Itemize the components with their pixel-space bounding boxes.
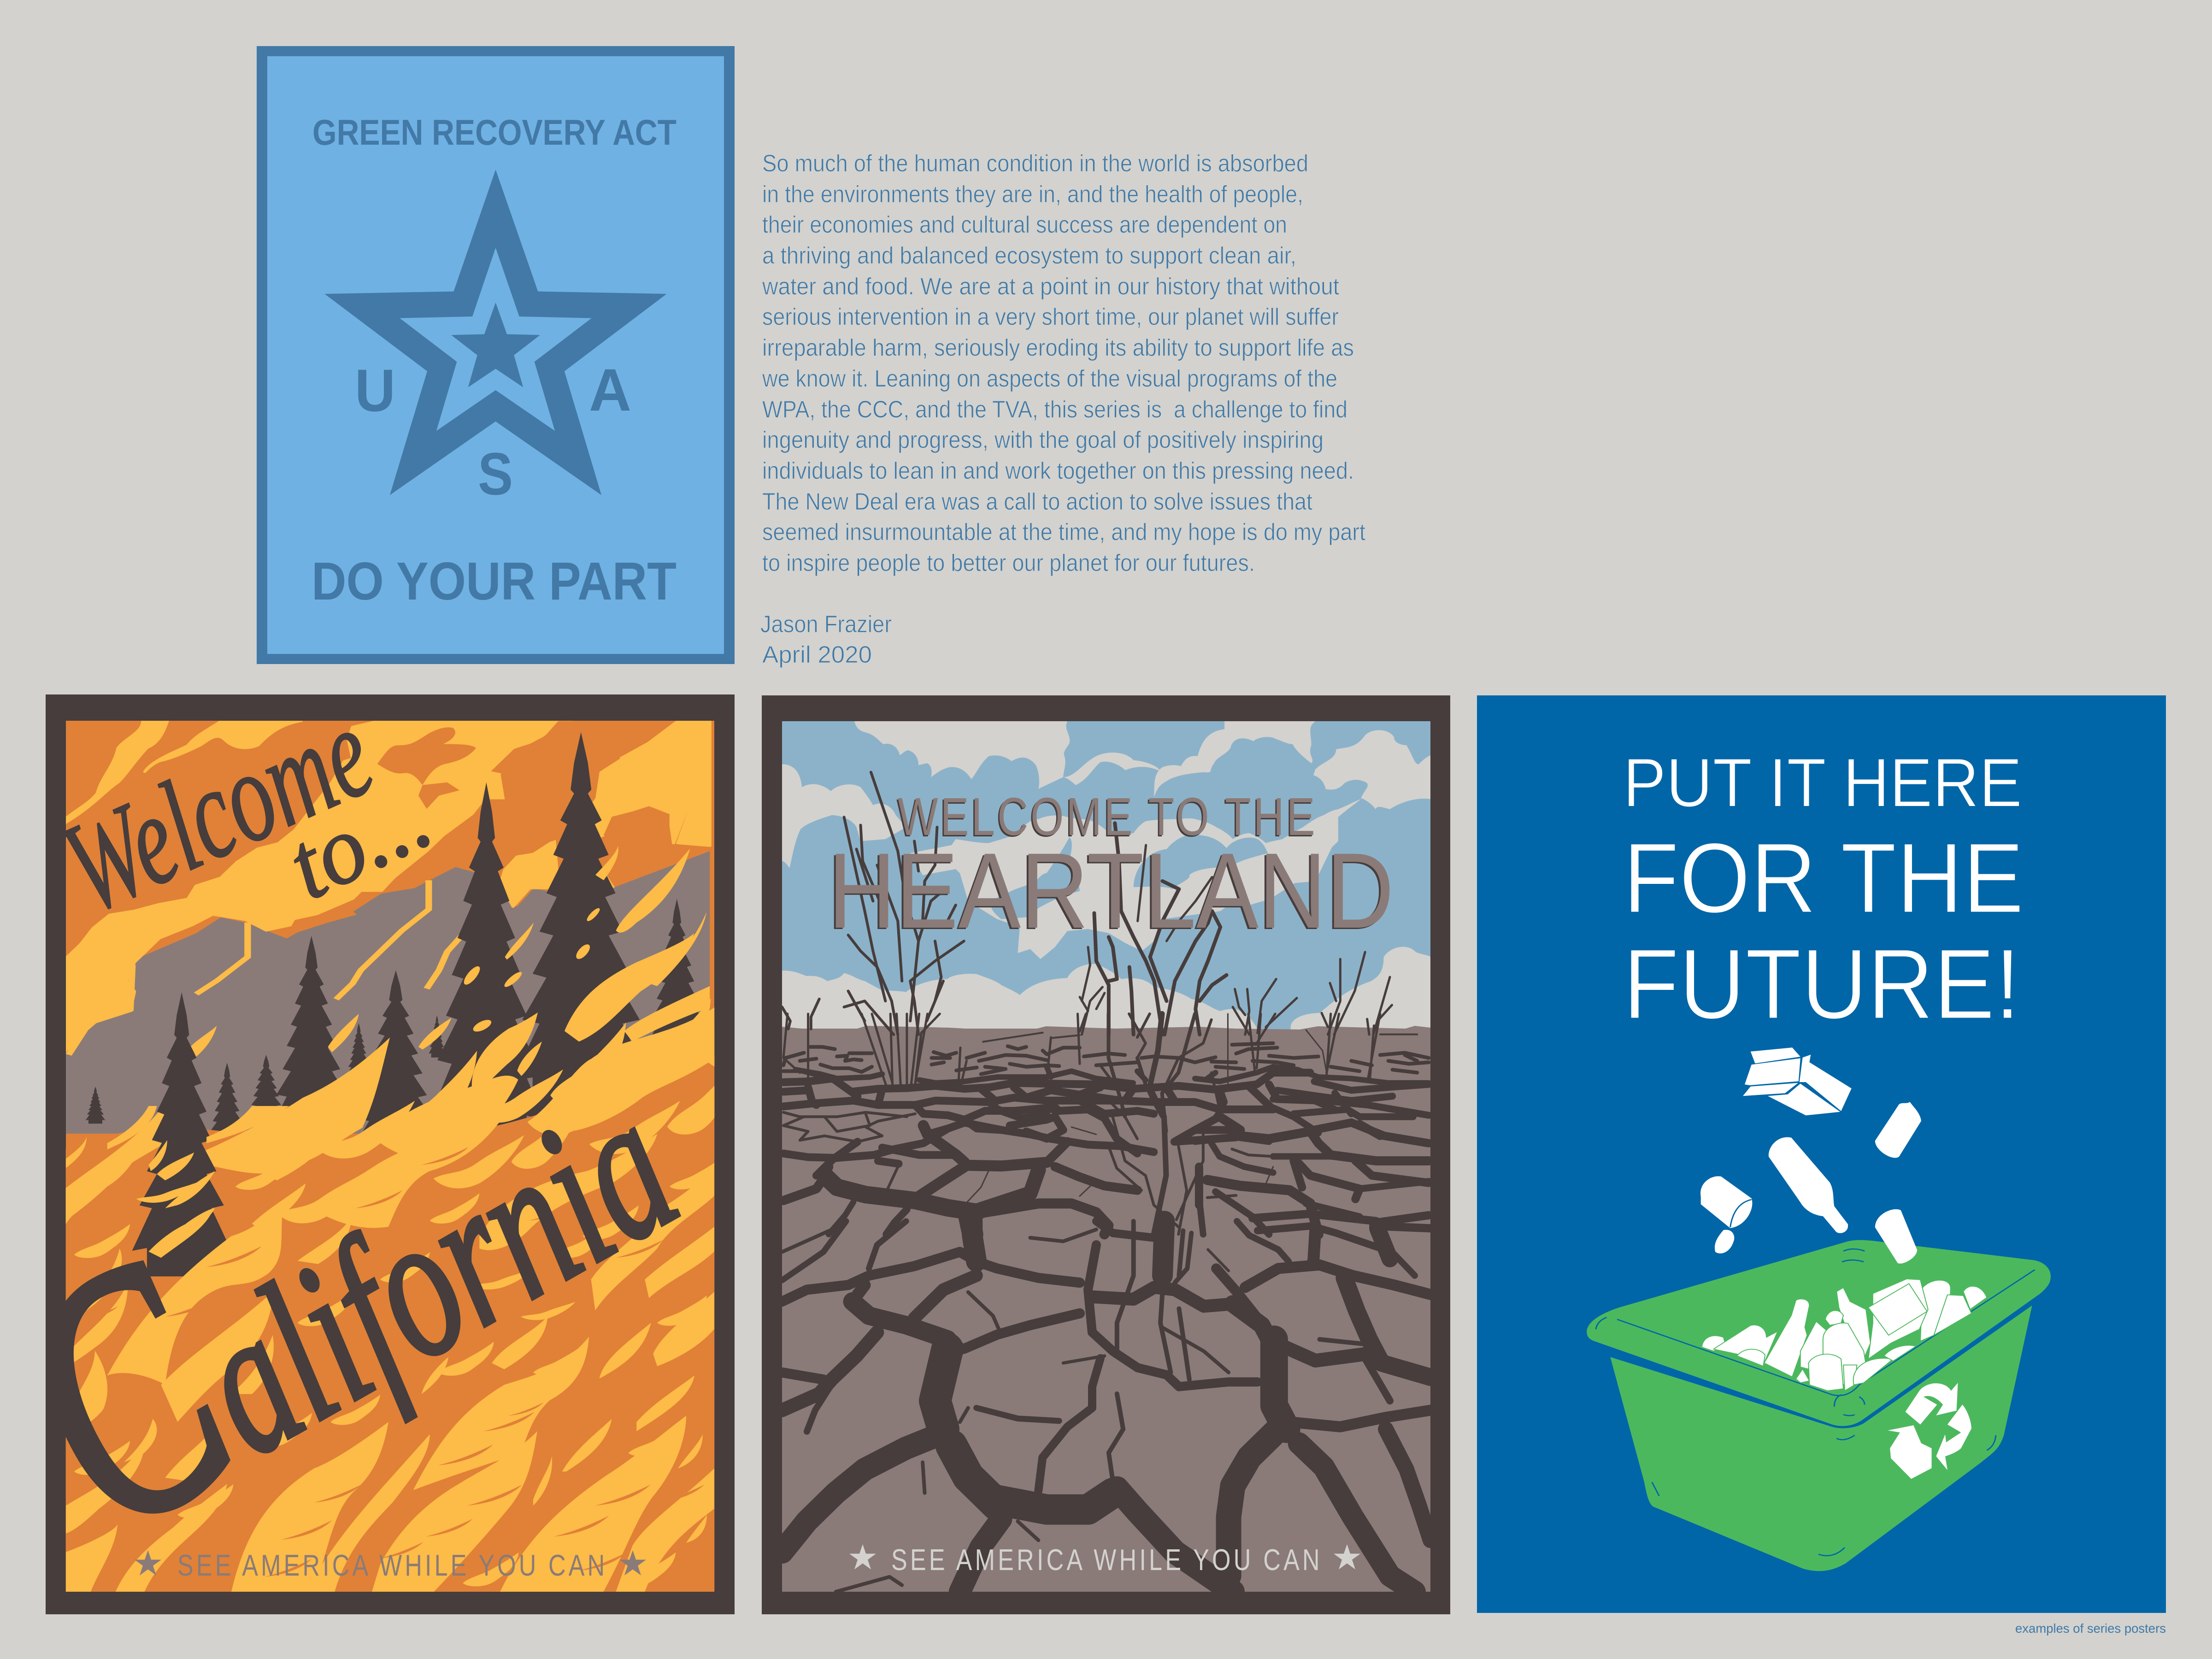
text block: artist statement: individuals to lean in and work together on this pressing need. <box>762 458 1354 484</box>
cracked earth ground <box>782 1026 1430 1592</box>
icon: tin cup with lid <box>1700 1176 1752 1253</box>
letter U: U <box>355 357 395 424</box>
text block: artist statement: irreparable harm, seriously eroding its ability to support life as <box>762 335 1354 361</box>
poster frame <box>762 695 1450 1614</box>
text block: artist statement: their economies and cultural success are dependent on <box>762 212 1287 238</box>
text block: artist statement: we know it. Leaning on aspects of the visual programs of the <box>762 365 1337 392</box>
conifer trees <box>86 732 706 1169</box>
icon: nested star <box>324 170 667 495</box>
heading: welcome to the: WELCOME TO THE <box>898 787 1315 847</box>
dead bushes above horizon <box>782 772 1392 1035</box>
text block: artist statement: water and food. We are at a point in our history that without <box>762 273 1340 300</box>
heading: welcome to the: WELCOME TO THE <box>896 788 1314 848</box>
heading: for the: FOR THE <box>1623 822 2024 934</box>
heading: put it here: PUT IT HERE <box>1623 744 2022 821</box>
bin interior line <box>1617 1270 2035 1395</box>
upper flames <box>66 998 797 1224</box>
icon: drink can <box>1875 1102 1921 1158</box>
recycled contents <box>1702 1279 1987 1391</box>
mountains <box>65 851 710 1134</box>
text block: artist statement: serious intervention in a very short time, our planet will suffer <box>762 304 1339 330</box>
letter A: A <box>589 356 631 424</box>
bin rim <box>1587 1240 2051 1426</box>
dead bushes below horizon <box>783 1014 1380 1234</box>
bin body <box>1610 1306 2032 1571</box>
icon: recycling symbol <box>1888 1383 1971 1479</box>
heading: future!: FUTURE! <box>1623 928 2020 1040</box>
text block: artist statement: So much of the human condition in the world is absorbed <box>762 150 1308 177</box>
heading: green recovery act: GREEN RECOVERY ACT <box>312 112 677 153</box>
wildfire hillside upper flames <box>66 998 797 1592</box>
distant and mid-ground cracks <box>783 1033 1429 1234</box>
bin recess shadows <box>1596 1249 1996 1556</box>
poster background <box>1477 695 2166 1613</box>
tagline: see america while you can: SEE AMERICA WHILE YOU CAN <box>177 1549 605 1582</box>
poster frame <box>46 694 735 1614</box>
text block: artist statement: The New Deal era was a call to action to solve issues that <box>762 488 1312 515</box>
cylinder container falling into bin <box>1875 1209 1917 1264</box>
sky <box>782 721 1430 1044</box>
text block: artist statement: in the environments they are in, and the health of people, <box>762 181 1303 208</box>
foreground conifer <box>132 992 231 1277</box>
flame licks on foreground tree <box>148 1140 215 1258</box>
large flame tongues <box>66 1106 719 1592</box>
smoke <box>65 721 710 1052</box>
text block: artist statement: a thriving and balanced ecosystem to support clean air, <box>762 242 1296 269</box>
sky, smoke, mountains and trees <box>66 721 714 1149</box>
panel: Green Recovery Act poster <box>257 46 735 664</box>
heading: Welcome to: Welcome <box>42 678 392 941</box>
flames over trees <box>184 846 710 1092</box>
text block: artist statement: to inspire people to better our planet for our futures. <box>762 550 1255 577</box>
icon: cardboard box <box>1743 1047 1852 1115</box>
text block: artist statement: WPA, the CCC, and the TVA, this series is a challenge to find <box>762 396 1347 423</box>
caption: examples of series posters <box>2015 1621 2166 1635</box>
panel: Welcome to the Heartland poster <box>762 695 1450 1614</box>
panel: Welcome to California poster <box>46 694 735 1614</box>
orange flame streaks <box>82 1147 704 1577</box>
icon: glass bottle <box>1769 1137 1848 1233</box>
sky patches through cloud <box>1134 835 1268 889</box>
letter S: S <box>478 440 513 507</box>
text block: artist statement: Jason Frazier <box>760 611 892 638</box>
clouds <box>782 721 1430 1041</box>
heading: heartland: HEARTLAND <box>828 831 1394 951</box>
text block: artist statement: seemed insurmountable at the time, and my hope is do my part <box>762 519 1365 546</box>
heading: heartland: HEARTLAND <box>826 832 1392 952</box>
smoke drips on mountains <box>69 870 612 1055</box>
poster field <box>267 56 724 654</box>
smoke cavities <box>289 721 670 933</box>
foreground cracks <box>782 1221 1430 1592</box>
illustration: recycling bin with falling items <box>1587 1047 2051 1571</box>
panel: Put it here for the future poster <box>1477 695 2166 1613</box>
text block: artist statement: April 2020 <box>762 641 872 668</box>
burning hillside base <box>66 1025 714 1592</box>
drought landscape illustration <box>782 721 1430 1592</box>
text block: artist statement: ingenuity and progress, with the goal of positively inspiring <box>762 427 1324 453</box>
poster frame <box>257 46 735 664</box>
tagline: see america while you can: SEE AMERICA WHILE YOU CAN <box>891 1544 1320 1577</box>
heading: to...: to... <box>272 762 447 920</box>
heading: do your part: DO YOUR PART <box>312 551 677 611</box>
text block: artist statement <box>760 150 1365 668</box>
lower hillside flames and foreground tree <box>66 992 719 1592</box>
